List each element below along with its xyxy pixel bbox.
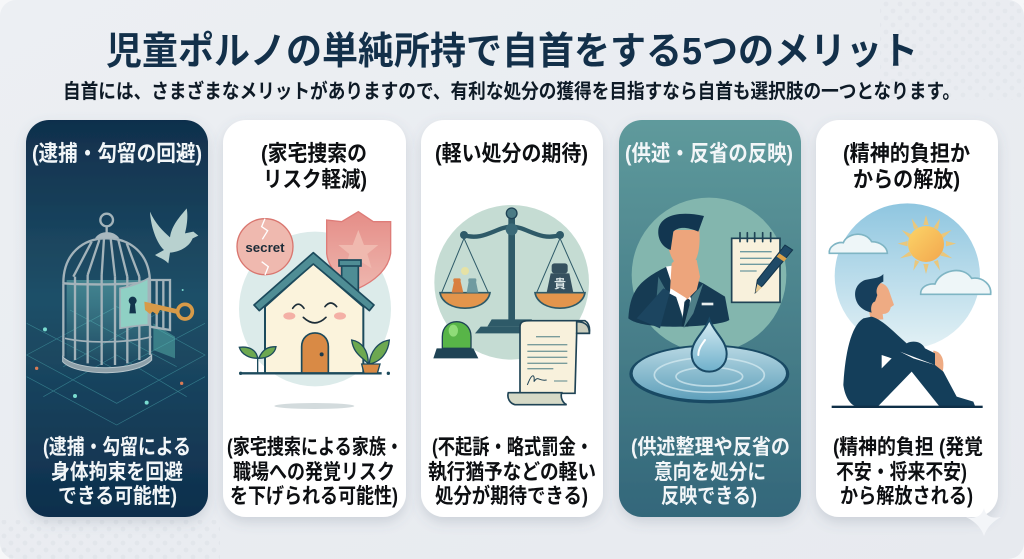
title: 児童ポルノの単純所持で自首をする5つのメリット — [106, 31, 918, 73]
panel: 家宅捜索のリスク軽減: 職場への発覚リスク — [233, 461, 395, 484]
panel: 供述・反省の反映 — [619, 120, 801, 517]
icon: scales, lamp and document: 貴 — [554, 276, 566, 291]
body text: (逮捕・勾留による — [43, 436, 191, 459]
panel: 軽い処分の期待: 処分が期待できる) — [435, 484, 588, 508]
panel: 精神的負担からの解放: から解放される) — [840, 485, 973, 508]
panel: 家宅捜索のリスク軽減: を下げられる可能性) — [230, 485, 398, 508]
panel: 精神的負担からの解放: からの解放) — [853, 167, 960, 192]
panel: 精神的負担からの解放 — [816, 120, 998, 517]
panel: 供述・反省の反映: 反映できる) — [661, 485, 757, 508]
panel: 供述・反省の反映: 意向を処分に — [654, 461, 766, 484]
panel: 逮捕・勾留の回避: 身体拘束を回避 — [51, 461, 183, 484]
heading: 供述・反省の反映: (供述・反省の反映) — [625, 141, 793, 166]
icon: open cage, key and dove — [27, 208, 205, 425]
panel: 逮捕・勾留の回避 — [26, 120, 208, 517]
body text: (家宅捜索による家族・ — [227, 436, 403, 459]
heading: 家宅捜索のリスク軽減: (家宅捜索の — [261, 141, 367, 166]
icon: reflecting man, notepad and water drop — [628, 198, 793, 403]
icon: house, secret and shield: secret — [245, 240, 285, 255]
icon: man looking at sun and clouds — [829, 203, 991, 408]
icon: scales, lamp and document — [433, 205, 590, 405]
heading: 精神的負担からの解放: (精神的負担か — [843, 141, 970, 166]
panel: 精神的負担からの解放: 不安・将来不安) — [836, 461, 967, 484]
body text: (不起訴・略式罰金・ — [432, 436, 593, 459]
panel: 家宅捜索のリスク軽減 — [223, 120, 406, 517]
heading: 軽い処分の期待: (軽い処分の期待) — [435, 141, 588, 166]
heading: 逮捕・勾留の回避: (逮捕・勾留の回避) — [32, 141, 202, 166]
icon: sparkle — [966, 508, 1001, 536]
body text: (供述整理や反省の — [631, 436, 790, 459]
panel: 軽い処分の期待: 執行猶予などの軽い — [428, 461, 596, 484]
panel: 逮捕・勾留の回避: できる可能性) — [58, 485, 177, 508]
body text: (精神的負担 (発覚 — [833, 436, 983, 459]
panel: 家宅捜索のリスク軽減: リスク軽減) — [263, 167, 367, 192]
icon: house, secret and shield — [237, 212, 391, 409]
panel: 軽い処分の期待 — [421, 120, 603, 517]
